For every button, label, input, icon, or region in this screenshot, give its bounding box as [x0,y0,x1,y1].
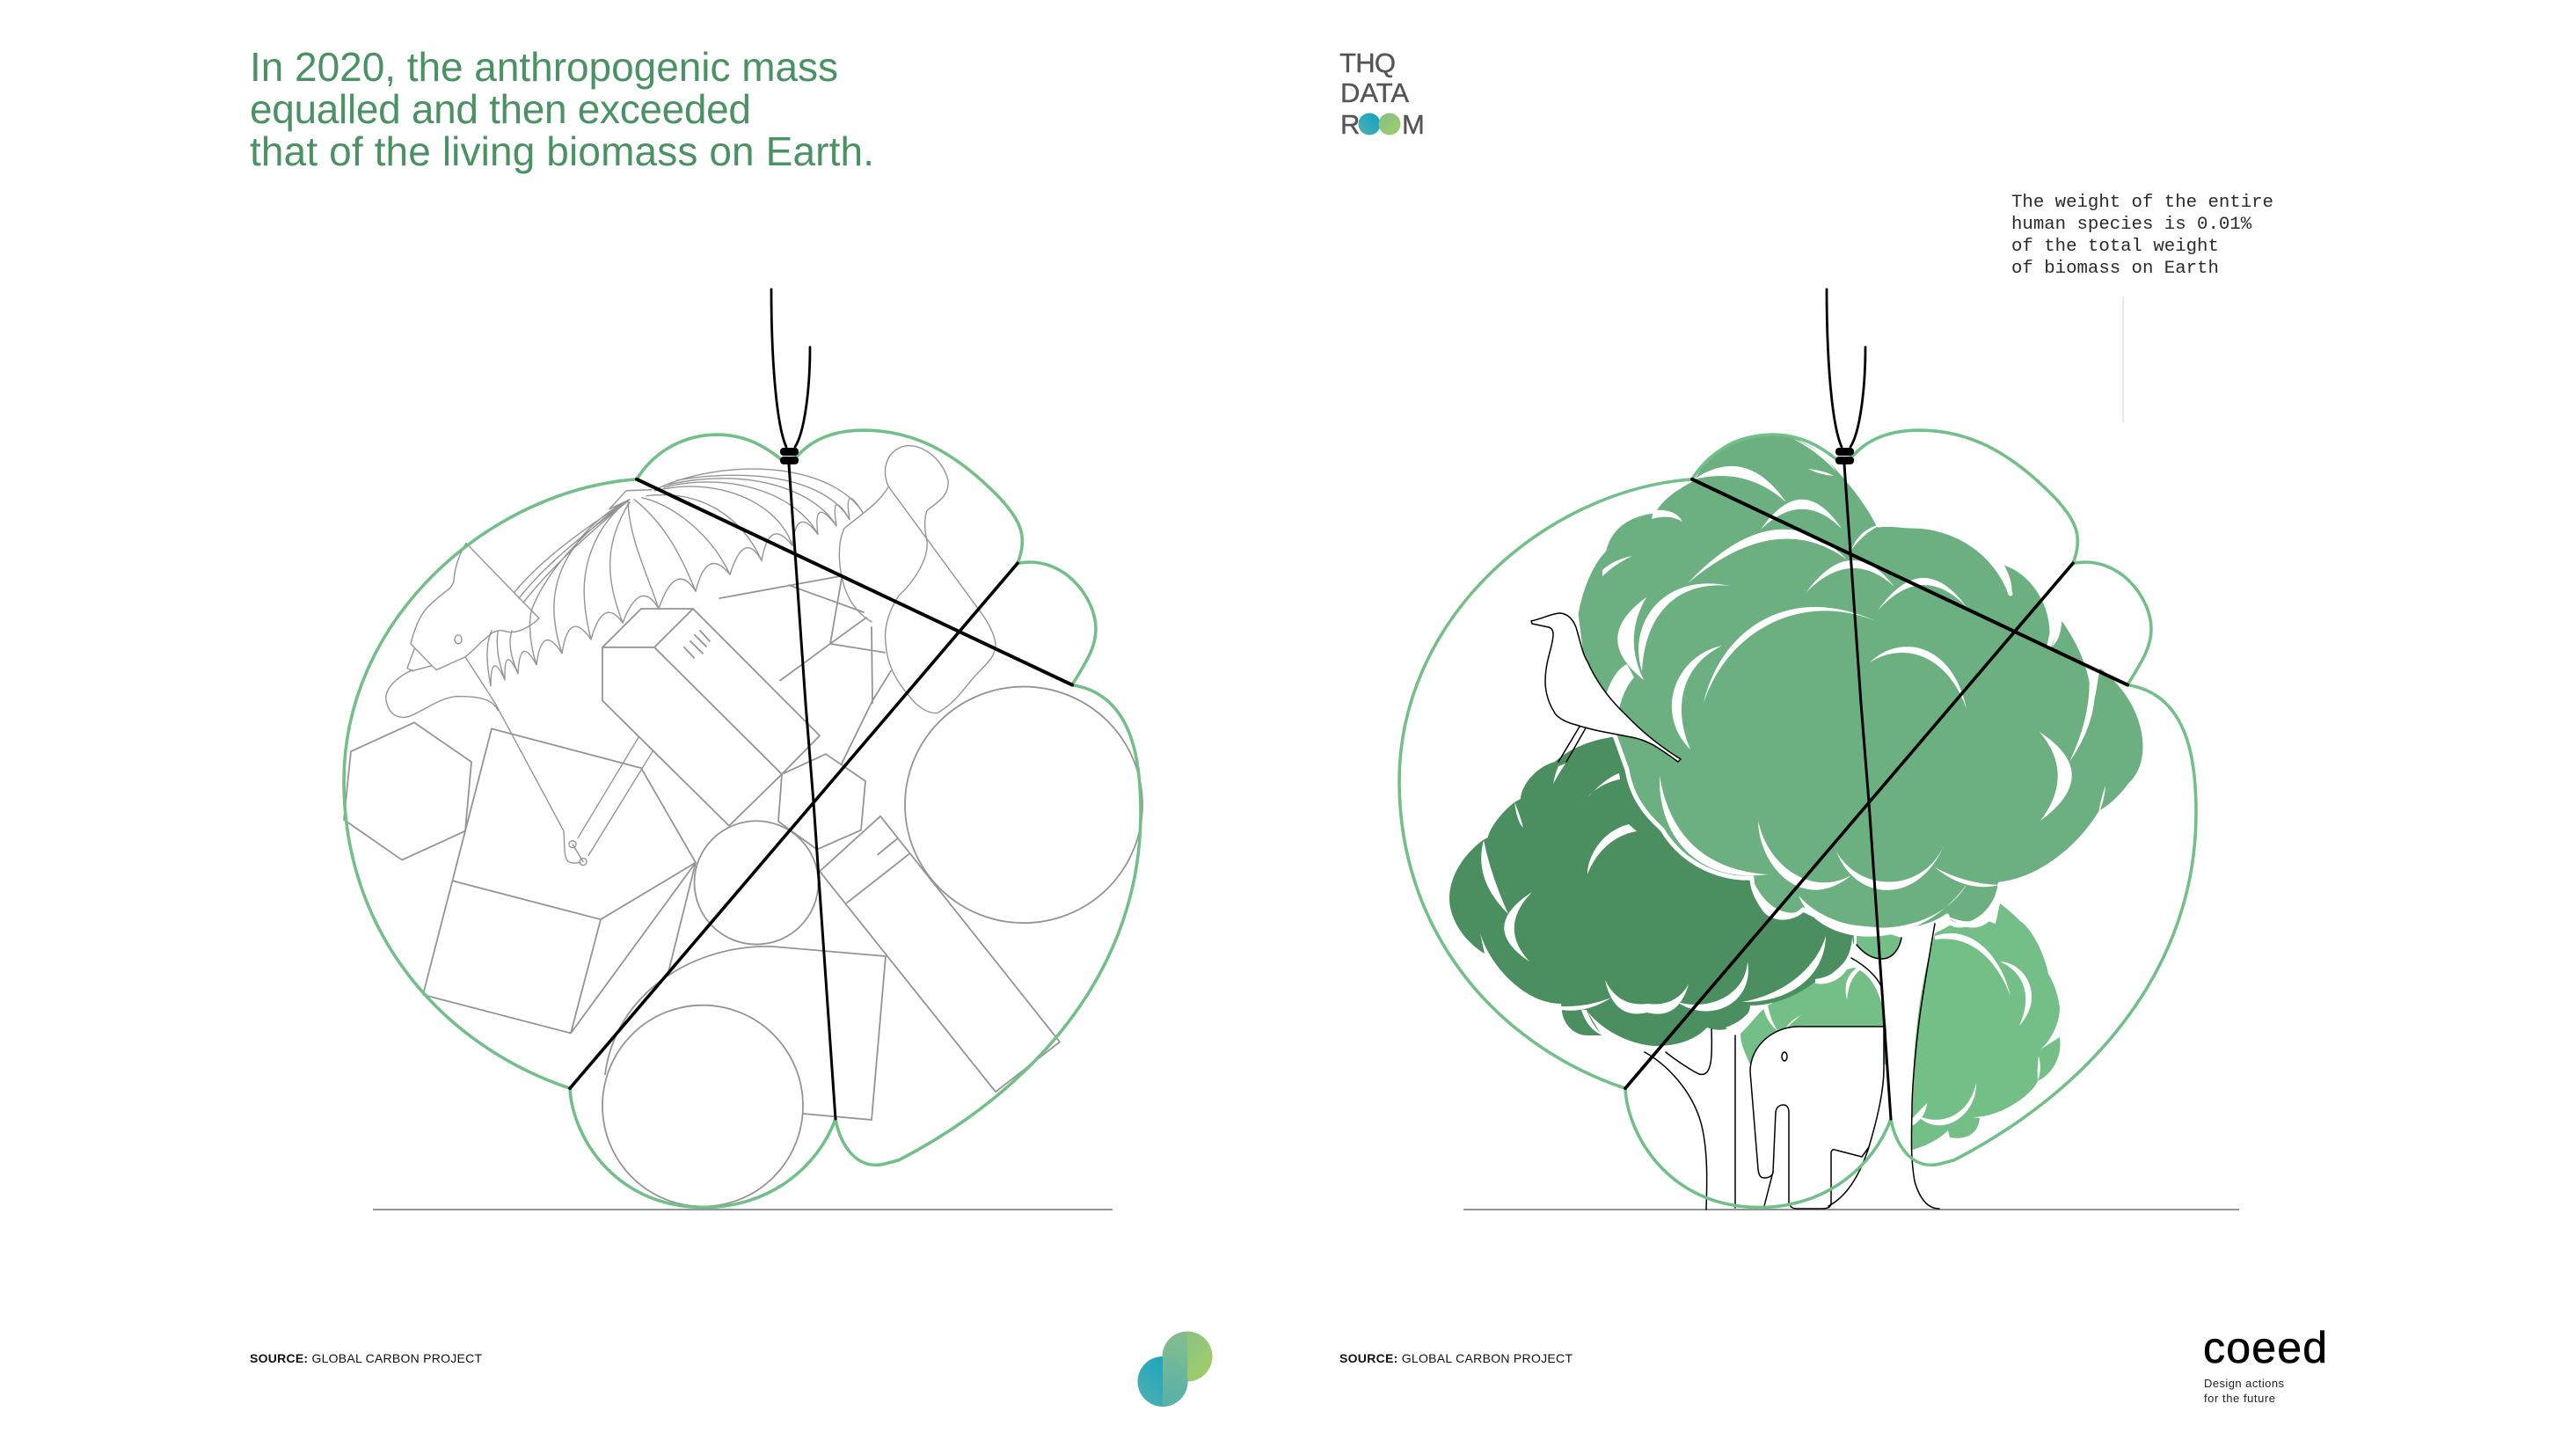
callout leader line [2122,296,2124,422]
icon: elephant [1750,1027,1884,1209]
crown highlights [1602,439,2105,937]
logo: the data room: R [1340,109,1360,140]
logo: gradient S mark [1138,1332,1212,1407]
logo: the data room: DATA [1340,77,1409,108]
icon: big circle [905,687,1142,923]
green outline left [344,430,1141,1207]
icon: hexagon [344,722,471,860]
panel: living biomass [1399,289,2239,1210]
title: In 2020, the anthropogenic mass [250,44,838,90]
trees and animals [1449,432,2145,1210]
source right: SOURCE: GLOBAL CARBON PROJECT [1339,1351,1573,1365]
icon: bat [386,469,863,866]
tree: dark green [1449,735,1854,1046]
icon: cube [423,728,696,1034]
ground line left [373,1209,1113,1210]
tree: light green [1740,903,2061,1150]
bat wing ribs [487,469,863,686]
callout: human species weight [2011,193,2273,279]
tree trunks [1645,924,1939,1210]
title [250,44,874,174]
logo: the data room: THQ [1339,48,1396,78]
callout: human species weight: The weight of the entire [2011,193,2273,213]
logo: coeed: coeed [2203,1323,2327,1372]
icon: tall box [820,816,1060,1092]
icon: mechanical struts [719,576,891,764]
panel: anthropogenic mass [344,289,1142,1210]
callout: human species weight: of biomass on Earth [2011,259,2219,279]
logo: the data room [1339,48,1425,140]
callout: human species weight: of the total weight [2011,237,2219,257]
icon: rounded container [605,863,886,1120]
frame lines right [1625,289,2127,1119]
logo: the data room: M [1402,109,1425,140]
man-made objects drawing [344,289,1142,1207]
ground line right [1463,1209,2239,1210]
logo: coeed [2203,1323,2327,1405]
logo: coeed: for the future [2204,1392,2275,1405]
icon: bottom circle [602,1005,803,1206]
logo: coeed: Design actions [2204,1377,2285,1390]
icon: small circle [695,821,818,945]
source left: SOURCE: GLOBAL CARBON PROJECT [250,1351,482,1365]
tree: main crown [1576,432,2145,937]
icon: organic bottle [839,446,996,713]
callout: human species weight: human species is 0.01% [2011,215,2252,235]
icon: right hexagon [778,754,865,850]
title: equalled and then exceeded [250,86,751,132]
icon: bird [1531,613,1681,762]
frame lines left [570,289,1072,1119]
green outline right [1399,430,2196,1207]
bat wing scallops [491,498,863,686]
title: that of the living biomass on Earth. [250,128,874,174]
icon: cuboid building [602,609,820,826]
